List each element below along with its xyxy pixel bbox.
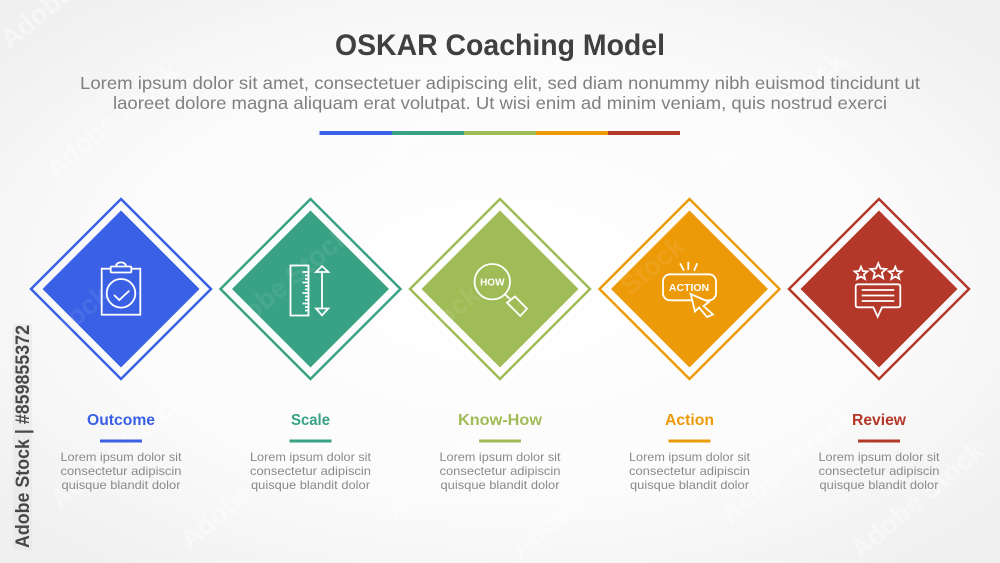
text: Adobe Stock: [705, 45, 851, 175]
text: Adobe Stock: [210, 220, 356, 350]
description: scale: quisque blandit dolor: [251, 478, 370, 492]
underline: action: [668, 440, 710, 442]
text: Adobe Stock: [175, 425, 321, 555]
description: know-how: consectetur adipiscin: [440, 464, 560, 478]
diamond: action: [600, 199, 780, 379]
underline: know-how: [479, 440, 521, 442]
text: Stock: [410, 279, 486, 350]
description: action: consectetur adipiscin: [629, 464, 750, 478]
description: outcome: consectetur adipiscin: [60, 464, 182, 478]
panel: outcome: [31, 199, 211, 492]
description: review: Lorem ipsum dolor sit: [818, 450, 940, 464]
icon: magnifier with HOW: [475, 264, 527, 316]
subtitle text: [80, 73, 920, 113]
description: scale: [250, 450, 372, 492]
text: Adobe Stock: [40, 55, 186, 185]
text: Adobe Stock: [165, 95, 311, 225]
diamond: outcome: [31, 199, 211, 379]
subtitle text: laoreet dolore magna aliquam erat volutpat. Ut wisi enim ad minim veniam, quis nostrud exerci: [113, 93, 887, 113]
stock id side text: Adobe Stock | #859855372: [13, 325, 34, 548]
icon: magnifier with HOW: HOW: [480, 278, 505, 288]
label: review: Review: [852, 412, 907, 429]
description: review: quisque blandit dolor: [820, 478, 939, 492]
description: know-how: [440, 450, 561, 492]
underline: review: [858, 440, 900, 442]
text: Adobe Stock: [380, 395, 526, 525]
panel: action: [600, 199, 780, 492]
multicolour title rule: [320, 131, 680, 135]
diamond: review: [789, 199, 969, 379]
icon: clipboard with check: [102, 262, 140, 315]
description: scale: consectetur adipiscin: [250, 464, 371, 478]
description: outcome: Lorem ipsum dolor sit: [60, 450, 182, 464]
panel: scale: [220, 199, 400, 492]
text: Adobe Stock: [370, 45, 516, 175]
text: Stock: [40, 279, 116, 350]
icon: action button with cursor: ACTION: [669, 282, 709, 294]
diamond: scale: [220, 199, 400, 379]
description: action: [629, 450, 751, 492]
description: action: quisque blandit dolor: [630, 478, 749, 492]
label: action: Action: [665, 412, 714, 429]
icon: action button with cursor: [663, 262, 716, 317]
text: Adobe Stock: [715, 400, 861, 530]
text: Adobe Stock: [45, 385, 191, 515]
panel: know-how: [410, 199, 590, 492]
description: review: consectetur adipiscin: [818, 464, 940, 478]
label: scale: Scale: [291, 412, 330, 429]
description: outcome: [60, 450, 182, 492]
text: Adobe Stock: [545, 230, 691, 360]
description: outcome: quisque blandit dolor: [62, 478, 181, 492]
description: know-how: Lorem ipsum dolor sit: [440, 450, 561, 464]
description: action: Lorem ipsum dolor sit: [629, 450, 751, 464]
label: outcome: Outcome: [87, 412, 155, 429]
label: know-how: Know-How: [458, 412, 543, 429]
text: Adobe Stock: [505, 435, 651, 563]
subtitle text: Lorem ipsum dolor sit amet, consectetuer adipiscing elit, sed diam nonummy nibh euismod tincidunt ut: [80, 73, 920, 93]
description: know-how: quisque blandit dolor: [440, 478, 560, 492]
icon: stars and review bubble: [855, 263, 902, 317]
panel: review: [789, 199, 969, 492]
diamond: know-how: [410, 199, 590, 379]
title: OSKAR Coaching Model: [335, 29, 665, 62]
icon: ruler and height arrow: [290, 266, 328, 316]
description: review: [818, 450, 940, 492]
text: Adobe Stock: [845, 435, 991, 563]
underline: scale: [290, 440, 332, 442]
underline: outcome: [100, 440, 142, 442]
description: scale: Lorem ipsum dolor sit: [250, 450, 372, 464]
